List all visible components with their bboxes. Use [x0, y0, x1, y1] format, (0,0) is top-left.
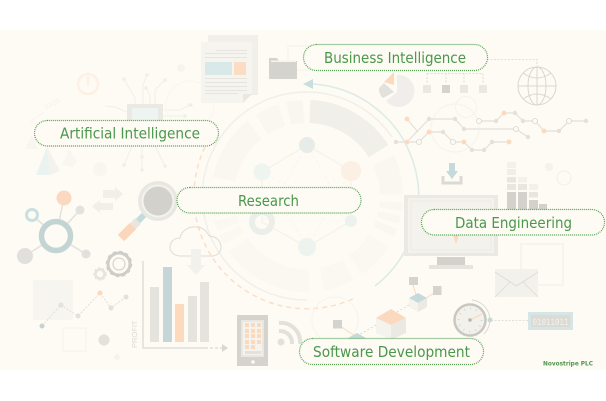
stacked bar icon: [507, 162, 547, 210]
pill: Software Development: [300, 338, 484, 364]
pill: Data Engineering: Data Engineering: [455, 214, 572, 232]
blue cube: [348, 333, 366, 344]
blue arc with arrow: [303, 79, 419, 286]
icon: pyramids: [25, 135, 77, 175]
left hub network: [17, 190, 90, 264]
icon: globe: [518, 67, 556, 105]
faint label XX01: XX01: [44, 97, 62, 112]
pill: Research: [177, 188, 361, 213]
icon: wifi: [278, 323, 300, 346]
brand label: Novostripe PLC: [543, 360, 593, 368]
pill: Research: Research: [238, 192, 299, 210]
icon: magnifier: [121, 181, 178, 238]
large cube: [376, 309, 406, 340]
icon: monitor: [404, 195, 498, 269]
segmented ring: [222, 112, 392, 280]
pill: Artificial Intelligence: Artificial Intelligence: [60, 124, 200, 142]
cube network: [312, 277, 442, 344]
line chart: [33, 280, 128, 328]
pill: Software Development: Software Development: [313, 343, 470, 361]
small cube: [409, 293, 427, 312]
icon: cloud: [170, 227, 221, 256]
outline square: [521, 244, 563, 285]
business intelligence connectors and boxes: [423, 60, 537, 93]
central research wheel: [194, 79, 419, 309]
connector graph: [394, 96, 588, 152]
hexagon network: [252, 137, 361, 256]
pie chart icon: [379, 72, 414, 107]
bar chart: [130, 261, 228, 352]
pill: Business Intelligence: Business Intelligence: [324, 49, 466, 67]
artificial intelligence icons: [25, 64, 214, 176]
icon: clock and binary display: 01011011: [532, 318, 568, 329]
icon: power: [78, 74, 98, 94]
icon: gears: [94, 252, 130, 280]
icon: download: [443, 163, 461, 183]
icon: tablet: [237, 315, 268, 366]
faint label XX01: [32, 97, 62, 124]
pill: Artificial Intelligence: [34, 120, 218, 146]
arrow down from cloud: [187, 249, 205, 275]
axis label: PROFIT: [130, 320, 139, 348]
icon: chip circuit: [105, 73, 192, 172]
peach dashed arc: [194, 147, 355, 309]
document icon: [201, 35, 258, 103]
icon: clock and binary display: [454, 300, 573, 336]
pill: Data Engineering: [422, 210, 604, 235]
exchange arrows: [92, 187, 123, 213]
pill: Business Intelligence: [304, 44, 488, 70]
folder icon: [269, 46, 318, 79]
thin outer ring: [202, 92, 392, 300]
icon: envelope: [495, 269, 538, 297]
